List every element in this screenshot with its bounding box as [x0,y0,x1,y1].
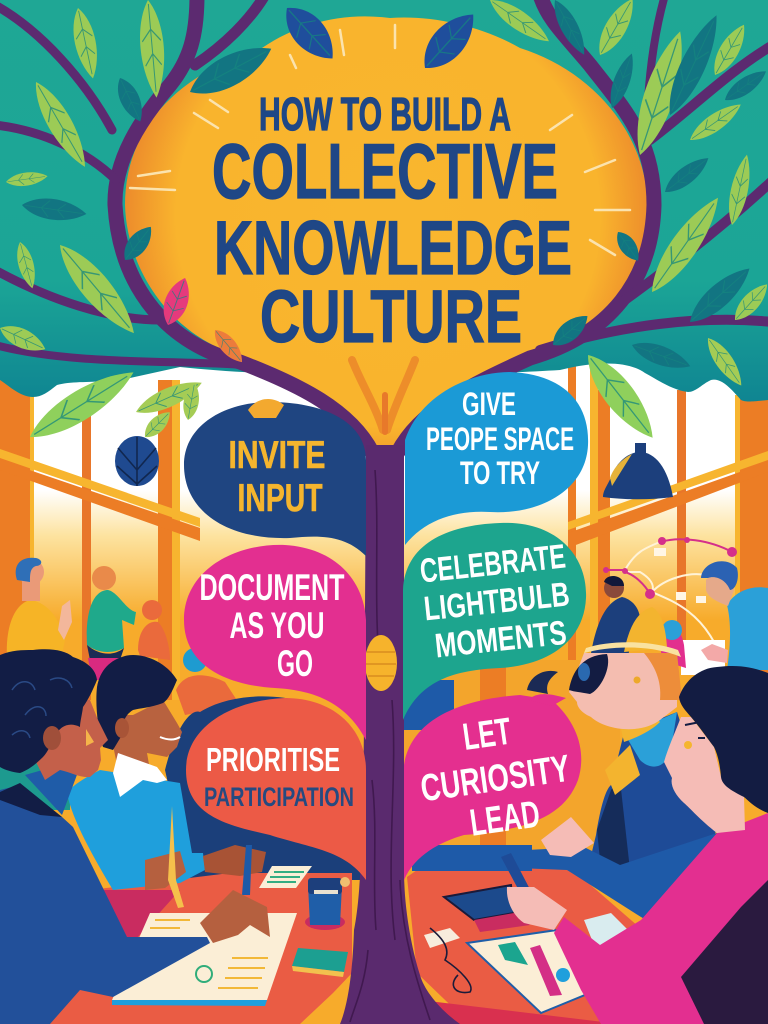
tree trunk [340,445,460,1024]
bulb on trunk [365,635,397,691]
person: woman in pink [501,666,768,1024]
hand with phone [501,853,534,900]
jacket sleeve and hand [517,817,717,950]
bubble: document as you go: DOCUMENT [200,567,345,608]
gold wall lower [400,660,620,880]
bubble: document as you go: GO [277,643,313,684]
top right leaves [485,0,768,326]
bubble: give people space to try: GIVE [462,386,516,422]
title [212,88,572,358]
bubble: let curiosity lead [404,671,581,880]
bubble: celebrate lightbulb moments: CELEBRATE [418,538,567,591]
title: HOW TO BUILD A [259,88,511,140]
bubble: celebrate lightbulb moments: LIGHTBULB [422,575,571,628]
green book [292,948,348,977]
bubble: invite input: INPUT [238,477,323,520]
top left leaves [0,0,168,358]
hanging lamp right [603,443,673,499]
table right [407,868,730,1024]
bubble: celebrate lightbulb moments: MOMENTS [433,614,568,665]
bubble: celebrate lightbulb moments [403,523,586,720]
bubble: prioritise participation: PARTICIPATION [204,782,354,812]
background figures right [569,537,768,900]
figure in navy [591,576,640,655]
crown detail: sun rays and funnel [130,25,630,432]
tree crown shape [125,16,648,452]
tree branches [0,0,768,452]
bubble: document as you go [184,545,366,740]
bubble: give people space to try: PEOPE SPACE [426,421,574,457]
table papers left [112,866,350,1006]
hand [200,890,270,943]
hands and pencils [145,851,186,890]
figure in coral [138,600,170,660]
yellow hat figure [624,607,686,668]
figure in teal [87,566,136,680]
whiteboard network [606,539,732,650]
bubble: let curiosity lead: LET [460,711,514,759]
top centre leaves [275,0,485,79]
lower canopy leaves [22,346,664,449]
blue strip under curiosity bubble [412,845,532,871]
trunk bark lines [350,470,430,1022]
small notepad [259,866,312,888]
title: COLLECTIVE [212,127,558,215]
bubble: let curiosity lead: CURIOSITY [418,748,572,810]
earbuds and cable [424,928,471,993]
bubble: invite input: INVITE [228,434,326,477]
person: man in blue sweater [67,655,266,908]
bubble: give people space to try: TO TRY [460,455,540,491]
background: office windows [0,360,768,1024]
bubble: let curiosity lead: LEAD [467,793,543,845]
tablet on table [444,885,530,932]
bubble: invite input [184,399,366,556]
teal gap behind seated men [0,760,70,810]
figure in yellow [7,558,72,665]
title: KNOWLEDGE [214,206,572,291]
pen cup [305,877,350,930]
bubble: give people space to try [405,372,588,545]
leaves [0,0,768,449]
background figures left [0,558,366,880]
bubble: document as you go: AS YOU [230,605,324,646]
figure with glasses [681,561,768,675]
bubble: prioritise participation: PRIORITISE [206,741,340,778]
table left [50,873,352,1024]
large notebook [112,913,297,1006]
bubble: prioritise participation [186,698,366,880]
drawing sheet on table [467,913,641,1013]
canopy: teal background [0,0,768,402]
person: man in navy sweater [0,649,270,1024]
table shadow left [95,890,180,940]
hanging leaf lamp left [115,436,159,486]
figures behind bubbles [165,648,366,880]
man in scarf and jacket [569,642,716,900]
title: CULTURE [260,275,522,358]
